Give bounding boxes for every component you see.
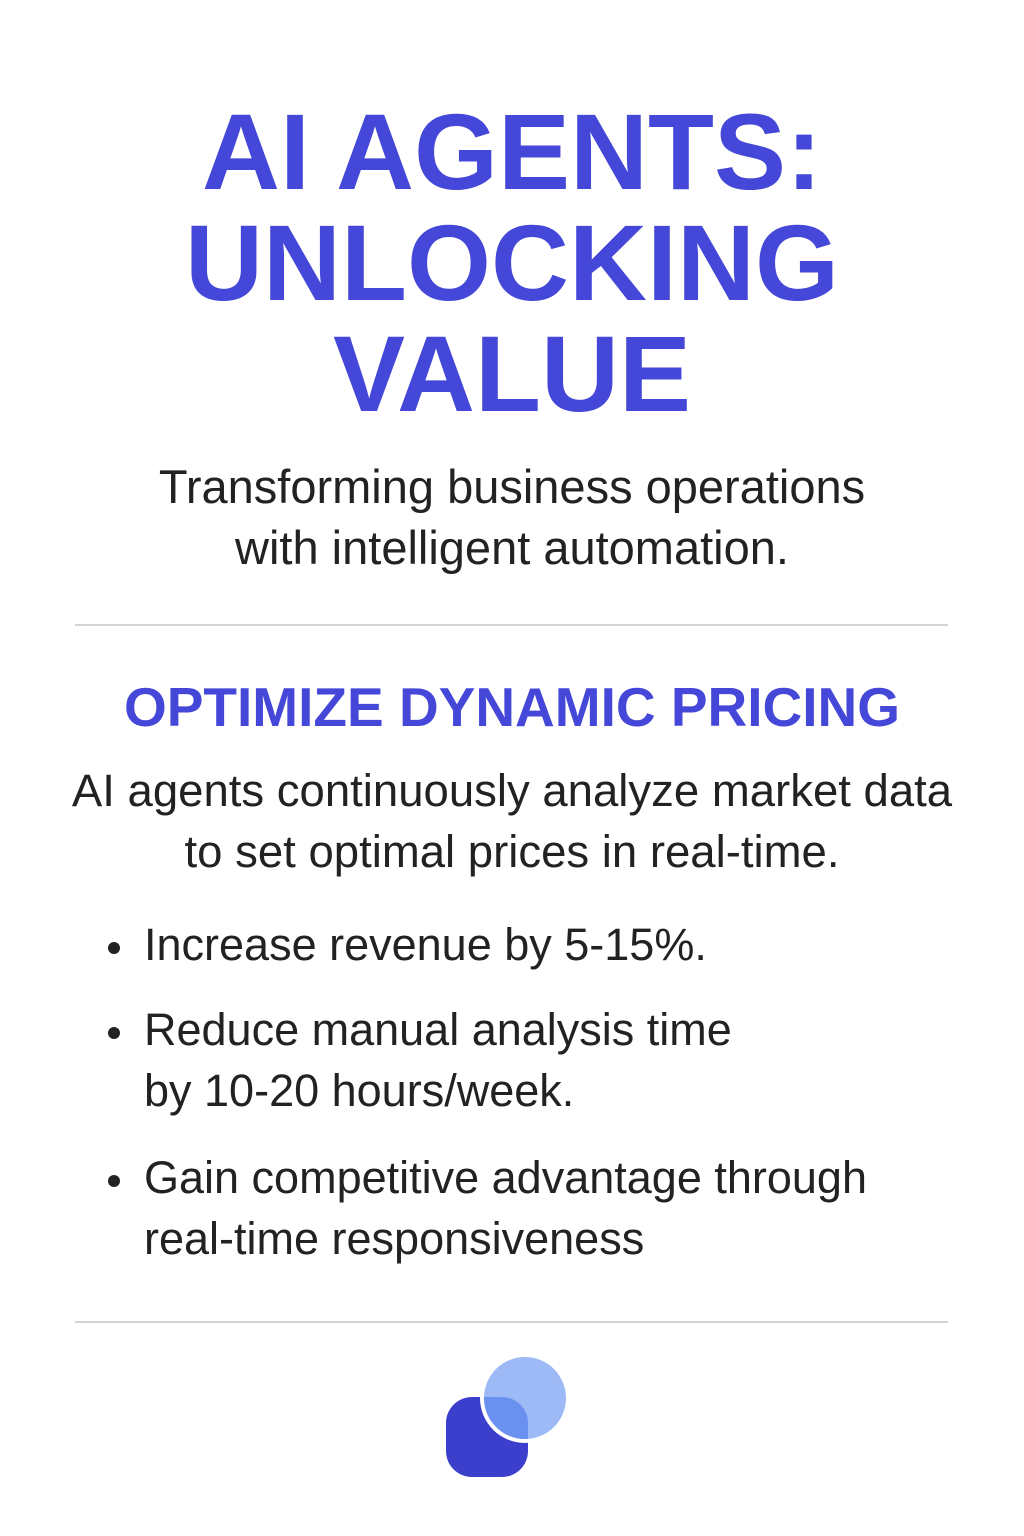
bullet 3: Gain competitive advantage through xyxy=(144,1152,867,1203)
title: VALUE xyxy=(333,313,691,434)
bullet 2: by 10-20 hours/week. xyxy=(144,1065,574,1116)
subtitle xyxy=(159,460,865,574)
title: AI AGENTS: xyxy=(202,91,822,212)
description: to set optimal prices in real-time. xyxy=(185,826,839,877)
bullet 2 xyxy=(144,999,732,1121)
section heading: OPTIMIZE DYNAMIC PRICING xyxy=(124,676,900,738)
description: AI agents continuously analyze market data xyxy=(72,765,952,816)
title: UNLOCKING xyxy=(185,202,839,323)
bullet 3 xyxy=(144,1147,867,1269)
bullet 1: Increase revenue by 5-15%. xyxy=(144,919,707,970)
description xyxy=(72,765,952,877)
icon: logo xyxy=(446,1357,566,1477)
title xyxy=(185,91,839,434)
bullet list xyxy=(108,919,867,1264)
bullet 3: real-time responsiveness xyxy=(144,1213,644,1264)
subtitle: with intelligent automation. xyxy=(235,521,789,574)
bullet 2: Reduce manual analysis time xyxy=(144,1004,732,1055)
subtitle: Transforming business operations xyxy=(159,460,865,513)
